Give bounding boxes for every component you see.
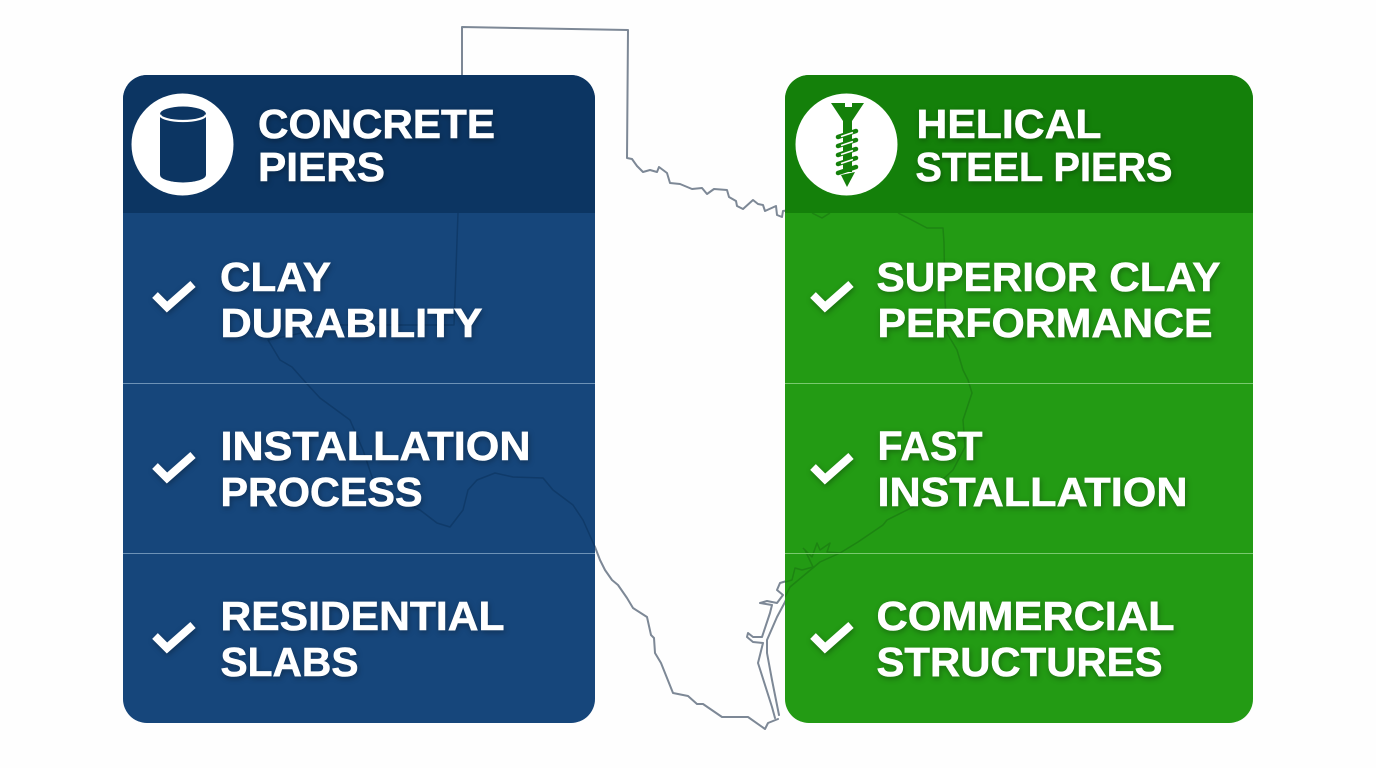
row: superior clay performance: SUPERIOR CLAY [876,254,1220,300]
row: installation process: INSTALLATION [220,423,530,469]
row: superior clay performance: PERFORMANCE [878,300,1212,346]
panel body: concrete [123,75,595,723]
heading: concrete piers: PIERS [258,144,385,190]
divider lines [123,384,595,554]
row: clay durability: CLAY [220,254,331,300]
row: fast installation: FAST [878,423,982,469]
row: installation process: PROCESS [220,469,422,515]
row: superior clay performance [813,254,1220,346]
heading: helical steel piers: HELICAL [916,101,1102,147]
panel header: helical [785,75,1253,213]
row: clay durability [155,254,482,346]
row: commercial structures [813,593,1174,685]
faint map line over concrete panel [268,213,595,547]
row: residential slabs: SLABS [220,639,358,685]
row: fast installation: INSTALLATION [878,469,1188,515]
panel header: concrete [123,75,595,213]
row: residential slabs [155,593,504,685]
icon: helical screw [796,94,898,196]
map outline: Texas [462,27,790,729]
divider lines [785,384,1253,554]
row: residential slabs: RESIDENTIAL [220,593,504,639]
heading: helical steel piers [916,101,1172,190]
row: commercial structures: STRUCTURES [876,639,1162,685]
faint map line over helical panel [785,213,972,597]
panel body: helical [785,75,1253,723]
row: clay durability: DURABILITY [220,300,482,346]
panel: helical steel piers [785,75,1253,723]
heading: concrete piers: CONCRETE [258,101,495,147]
icon: concrete cylinder [132,94,234,196]
row: commercial structures: COMMERCIAL [876,593,1174,639]
row: installation process [155,423,530,515]
heading: concrete piers [258,101,495,190]
panel: concrete piers [123,75,595,723]
row: fast installation [813,423,1188,515]
heading: helical steel piers: STEEL PIERS [916,144,1172,190]
